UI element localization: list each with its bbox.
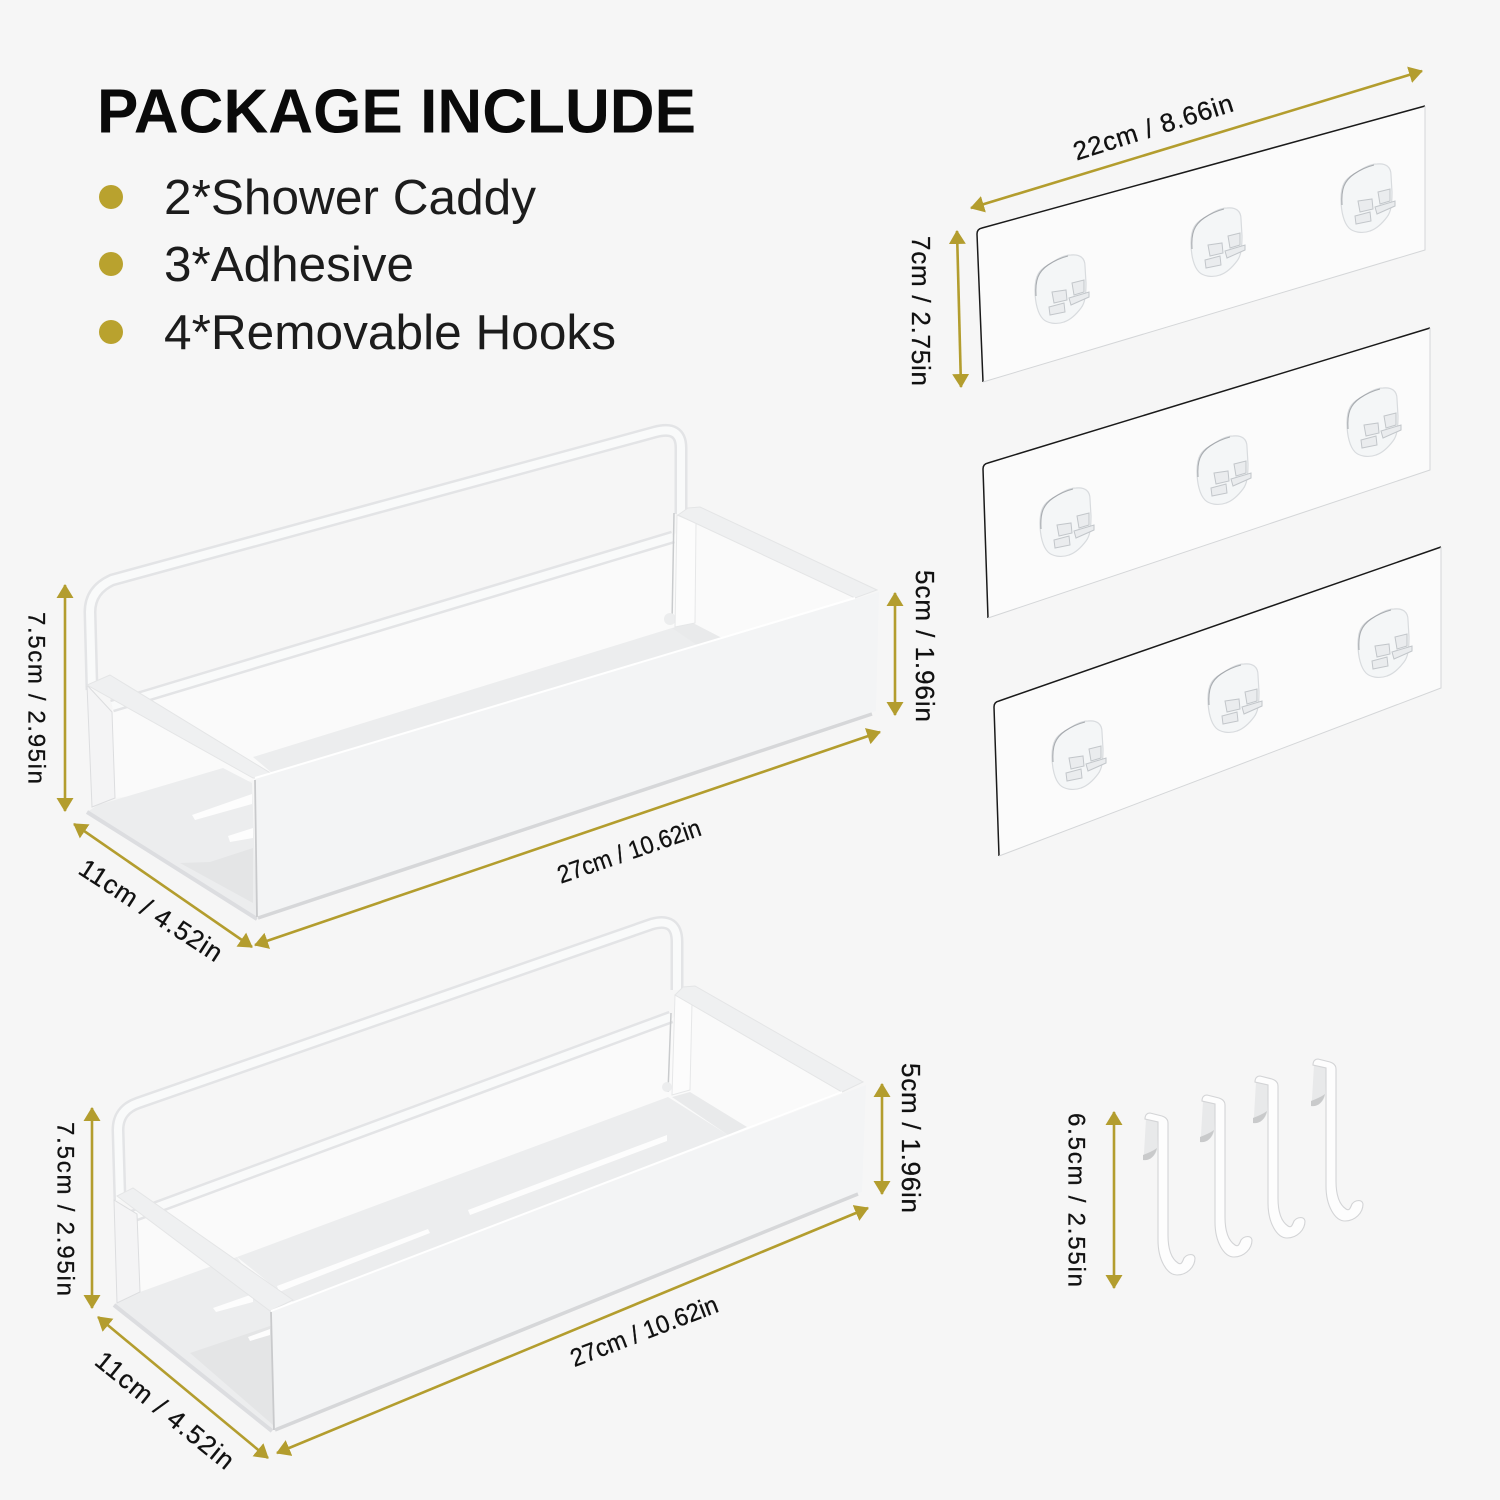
caddy 1 left leg and bracket [87, 675, 277, 807]
caddy 1 interior [112, 515, 860, 798]
dimension: caddy 1 height: 7.5cm / 2.95in [23, 612, 50, 784]
dimension: adhesive height [906, 231, 961, 387]
dimension: caddy 2 length: 27cm / 10.62in [566, 1291, 722, 1373]
dimension: caddy 1 side height: 5cm / 1.96in [910, 570, 940, 722]
bullet item: shower caddy: 2*Shower Caddy [164, 170, 536, 225]
package list [99, 170, 616, 360]
caddy 1 [87, 430, 879, 919]
dimension: caddy 1 length: 27cm / 10.62in [554, 814, 705, 889]
dimension: adhesive height: 7cm / 2.75in [906, 236, 936, 386]
title: PACKAGE INCLUDE [97, 78, 696, 146]
bullet item: adhesive: 3*Adhesive [164, 237, 414, 292]
bullet item: removable hooks: 4*Removable Hooks [164, 305, 616, 360]
dimension: caddy 2 depth: 11cm / 4.52in [89, 1345, 240, 1475]
dimension: caddy 1 depth [74, 824, 252, 968]
caddy 1 shelf floor [87, 623, 722, 919]
caddy 2 [114, 922, 866, 1431]
dimension: caddy 2 depth [89, 1317, 268, 1475]
adhesive panel 3 [994, 547, 1441, 856]
caddy 2 right bracket [672, 986, 863, 1095]
dimension: adhesive width [971, 71, 1422, 208]
caddy 2 shelf floor [114, 1092, 747, 1431]
caddy 2 left leg and bracket [114, 1188, 293, 1311]
caddy 1 back rails [90, 430, 681, 706]
dimension: caddy 2 height: 7.5cm / 2.95in [52, 1122, 79, 1296]
dimension: caddy 1 length [255, 732, 880, 945]
caddy 1 right bracket [675, 507, 877, 627]
caddy 2 interior [137, 1003, 842, 1310]
adhesive panel 1 [977, 106, 1425, 382]
adhesive panel 2 [983, 328, 1430, 618]
caddy 2 back rails [118, 922, 677, 1216]
caddy 1 front panel [255, 592, 879, 918]
dimension: caddy 2 side height: 5cm / 1.96in [896, 1063, 926, 1213]
dimension: hook height: 6.5cm / 2.55in [1063, 1113, 1090, 1287]
dimension: adhesive width: 22cm / 8.66in [1069, 88, 1237, 166]
dimension: caddy 2 length [277, 1208, 868, 1453]
caddy 2 front panel [271, 1085, 866, 1431]
dimension: caddy 1 depth: 11cm / 4.52in [74, 853, 228, 968]
removable hooks [1143, 1059, 1363, 1275]
